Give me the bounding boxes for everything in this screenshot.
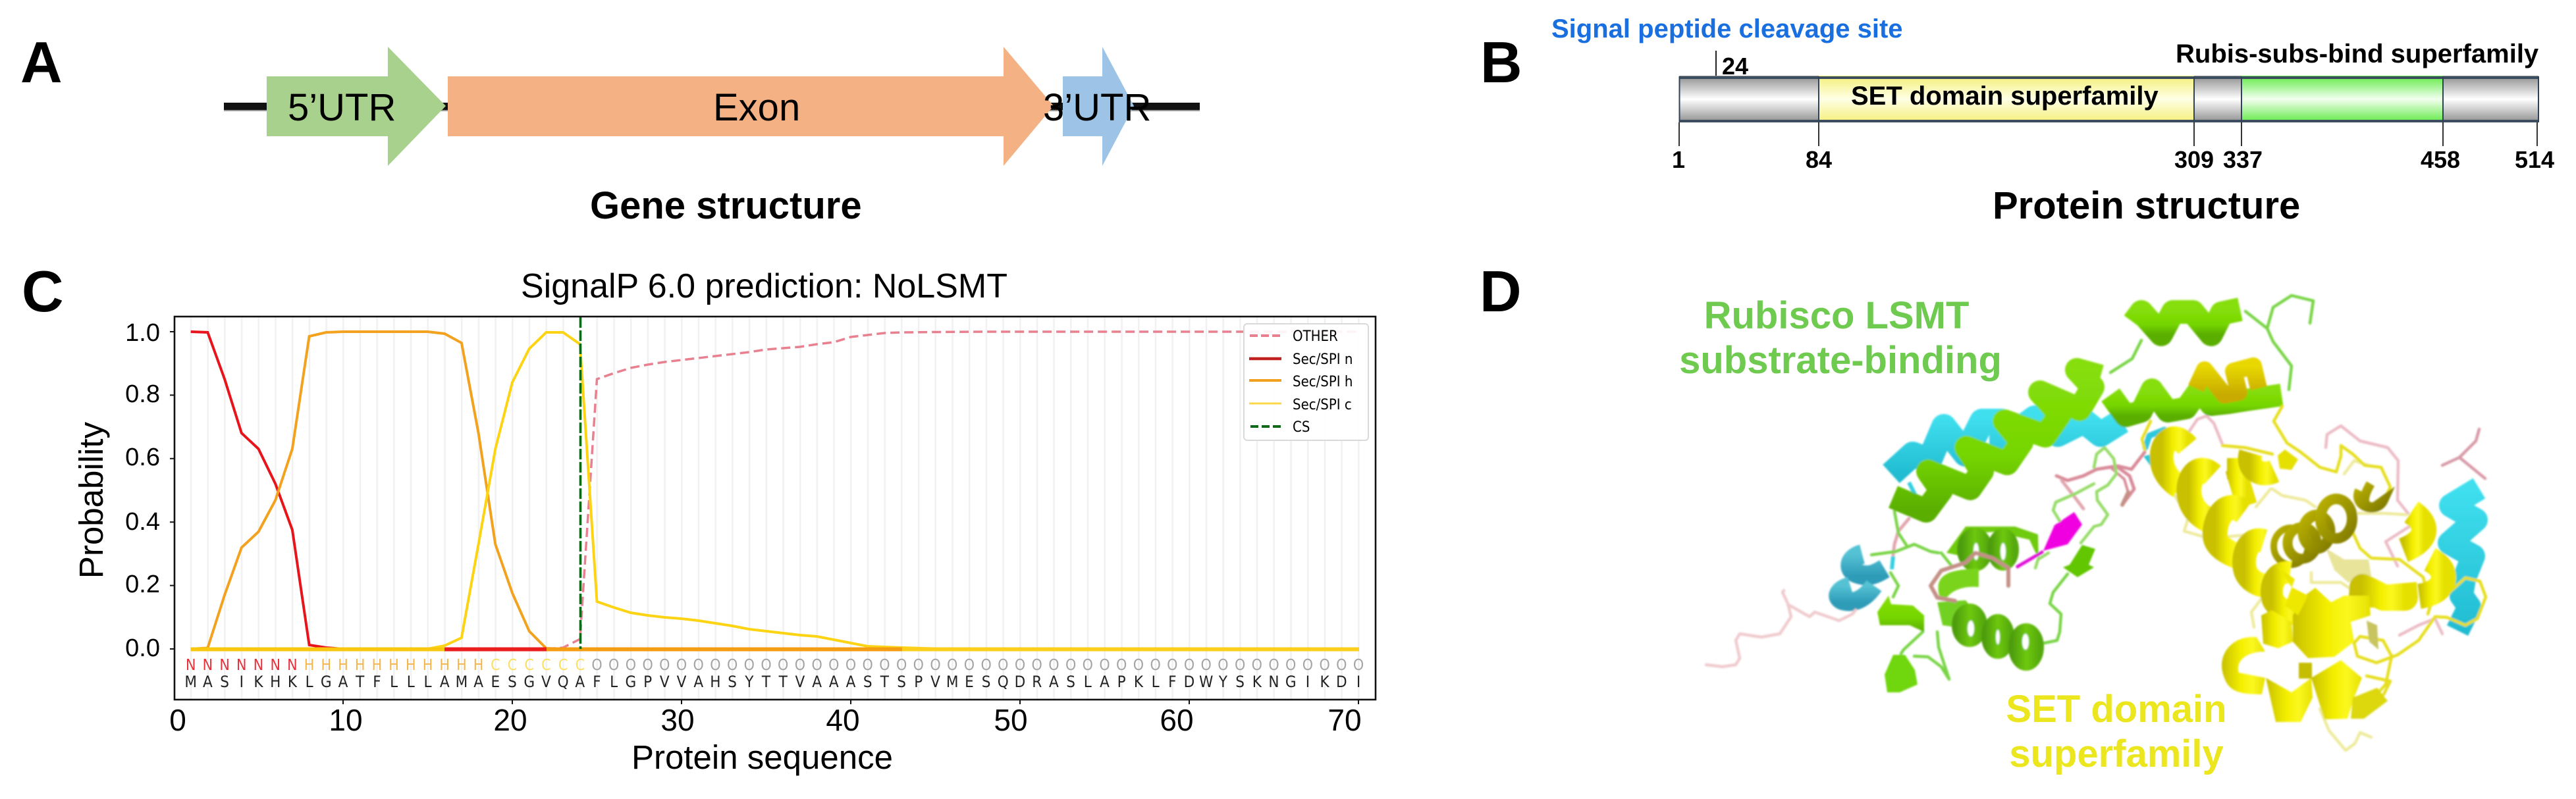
gene backbone line	[224, 103, 1200, 111]
panel C: SignalP prediction chart	[22, 259, 1376, 776]
label: Rubisco LSMT substrate-binding	[1679, 294, 2002, 382]
label 3'UTR: 3’UTR	[1043, 86, 1151, 129]
y axis tick labels: 0.2	[125, 571, 160, 598]
green second helix	[2110, 390, 2282, 416]
y axis tick labels: 0.8	[125, 380, 160, 408]
position ticks	[1679, 122, 2537, 146]
chart title: SignalP 6.0 prediction: NoLSMT	[521, 267, 1007, 305]
legend: Sec/SPI h	[1293, 374, 1353, 390]
label: Rubisco LSMT substrate-binding: substrate-binding	[1679, 339, 2002, 382]
yellow thin loops	[2142, 406, 2486, 750]
label: Rubis-subs-bind superfamily: Rubis-subs-bind superfamily	[2176, 39, 2539, 68]
position labels: 514	[2515, 146, 2554, 173]
yellow helices bottom	[2222, 637, 2388, 722]
panel letter A: A	[20, 30, 63, 95]
baseline of zero probability series	[191, 648, 1359, 652]
green lower domain helices	[1877, 527, 2095, 692]
y axis tick labels: 0.0	[125, 634, 160, 662]
position labels: 309	[2174, 146, 2214, 173]
x axis tick labels: 0	[169, 703, 186, 737]
heading: gene structure: Gene structure	[590, 184, 862, 227]
cleavage site marker 24: 24	[1722, 53, 1748, 80]
label 5'UTR: 5’UTR	[288, 86, 396, 129]
x axis tick labels: 30	[660, 703, 695, 737]
amino acid sequence: MASIKHKLGATFLLLAMAESGVQAFLGPVVAHSYTTVAAASTSPVMESQDRASLAPKLFDWYSKNGIKDI	[184, 673, 1360, 691]
panel B: protein structure	[1480, 14, 2554, 227]
green top helix	[2133, 309, 2240, 334]
panel letter C: C	[22, 259, 64, 324]
label: signal peptide cleavage site: Signal peptide cleavage site	[1551, 14, 1903, 43]
y axis tick labels: 0.6	[125, 444, 160, 471]
label: SET domain superfamily	[2006, 688, 2227, 775]
legend	[1244, 324, 1368, 440]
position labels: 337	[2223, 146, 2263, 173]
panel D: 3D protein model	[1480, 259, 2486, 775]
y axis tick labels	[125, 319, 160, 662]
arrow: 5'UTR	[267, 47, 446, 166]
x axis title: Protein sequence	[631, 738, 893, 776]
series: Sec/SPI n	[191, 332, 343, 649]
position labels	[1672, 146, 2554, 173]
series: Sec/SPI h	[191, 332, 563, 649]
residue state labels: OOOOOOOOOOOOOOOOOOOOOOOOOOOOOOOOOOOOOOOOOOOOOO	[591, 657, 1364, 674]
yellow blocks upper	[2278, 450, 2298, 470]
residue state labels: CCCCCC	[491, 657, 585, 674]
cyan helices	[1891, 418, 2479, 631]
label: SET domain superfamily: SET domain superfamily	[1851, 82, 2159, 111]
residue state labels	[186, 657, 1364, 674]
panel letter B: B	[1480, 30, 1522, 95]
y axis tick labels: 1.0	[125, 319, 160, 347]
label: Rubisco LSMT substrate-binding: Rubisco LSMT	[1704, 294, 1969, 337]
green thin loops	[1871, 296, 2313, 679]
heading: protein structure: Protein structure	[1993, 184, 2300, 227]
x axis tick labels: 70	[1328, 703, 1362, 737]
residue state labels: HHHHHHHHHHH	[304, 657, 483, 674]
plot frame and ticks	[170, 317, 1376, 704]
x axis tick labels: 50	[994, 703, 1028, 737]
yellow helices right	[2361, 512, 2444, 607]
y axis tick labels: 0.4	[125, 508, 160, 536]
domain bar	[1679, 76, 2538, 122]
green long helix	[1893, 370, 2101, 511]
brown-pink coil over green	[1931, 492, 2128, 601]
pale sheets	[2326, 548, 2378, 650]
label: SET domain superfamily: SET domain	[2006, 688, 2227, 731]
y axis title: Probability	[72, 421, 110, 579]
x axis tick labels: 40	[826, 703, 860, 737]
x axis tick labels: 60	[1160, 703, 1194, 737]
x axis tick labels: 20	[493, 703, 527, 737]
label: SET domain superfamily: superfamily	[2009, 733, 2224, 775]
teal helix lower left	[1838, 554, 1885, 602]
legend: CS	[1293, 419, 1310, 436]
position labels: 84	[1806, 146, 1832, 173]
yellow helices centre	[2261, 566, 2371, 658]
pale pink loops	[1706, 416, 2485, 667]
cleavage site dashed line	[579, 317, 581, 649]
legend: OTHER	[1293, 328, 1338, 345]
panel letter D: D	[1480, 259, 1522, 324]
series: Sec/SPI c	[428, 332, 986, 649]
position labels: 1	[1672, 146, 1685, 173]
yellow helices upper	[2162, 438, 2298, 615]
residue state labels: NNNNNNN	[186, 657, 298, 674]
arrow: 3'UTR	[1063, 47, 1134, 166]
label Exon: Exon	[713, 86, 800, 129]
arrow: exon	[448, 47, 1054, 166]
legend: Sec/SPI n	[1293, 351, 1353, 368]
position labels: 458	[2421, 146, 2460, 173]
x axis tick labels: 10	[329, 703, 363, 737]
ribbon model	[1706, 296, 2486, 750]
series: OTHER	[546, 332, 1358, 649]
gold helix over green	[2196, 366, 2259, 395]
legend: Sec/SPI c	[1293, 397, 1352, 413]
residue grid	[182, 317, 1360, 699]
panel A: gene structure	[20, 30, 1200, 227]
magenta strand	[2016, 512, 2082, 567]
olive rings	[2274, 484, 2384, 565]
x axis tick labels	[169, 703, 1362, 737]
